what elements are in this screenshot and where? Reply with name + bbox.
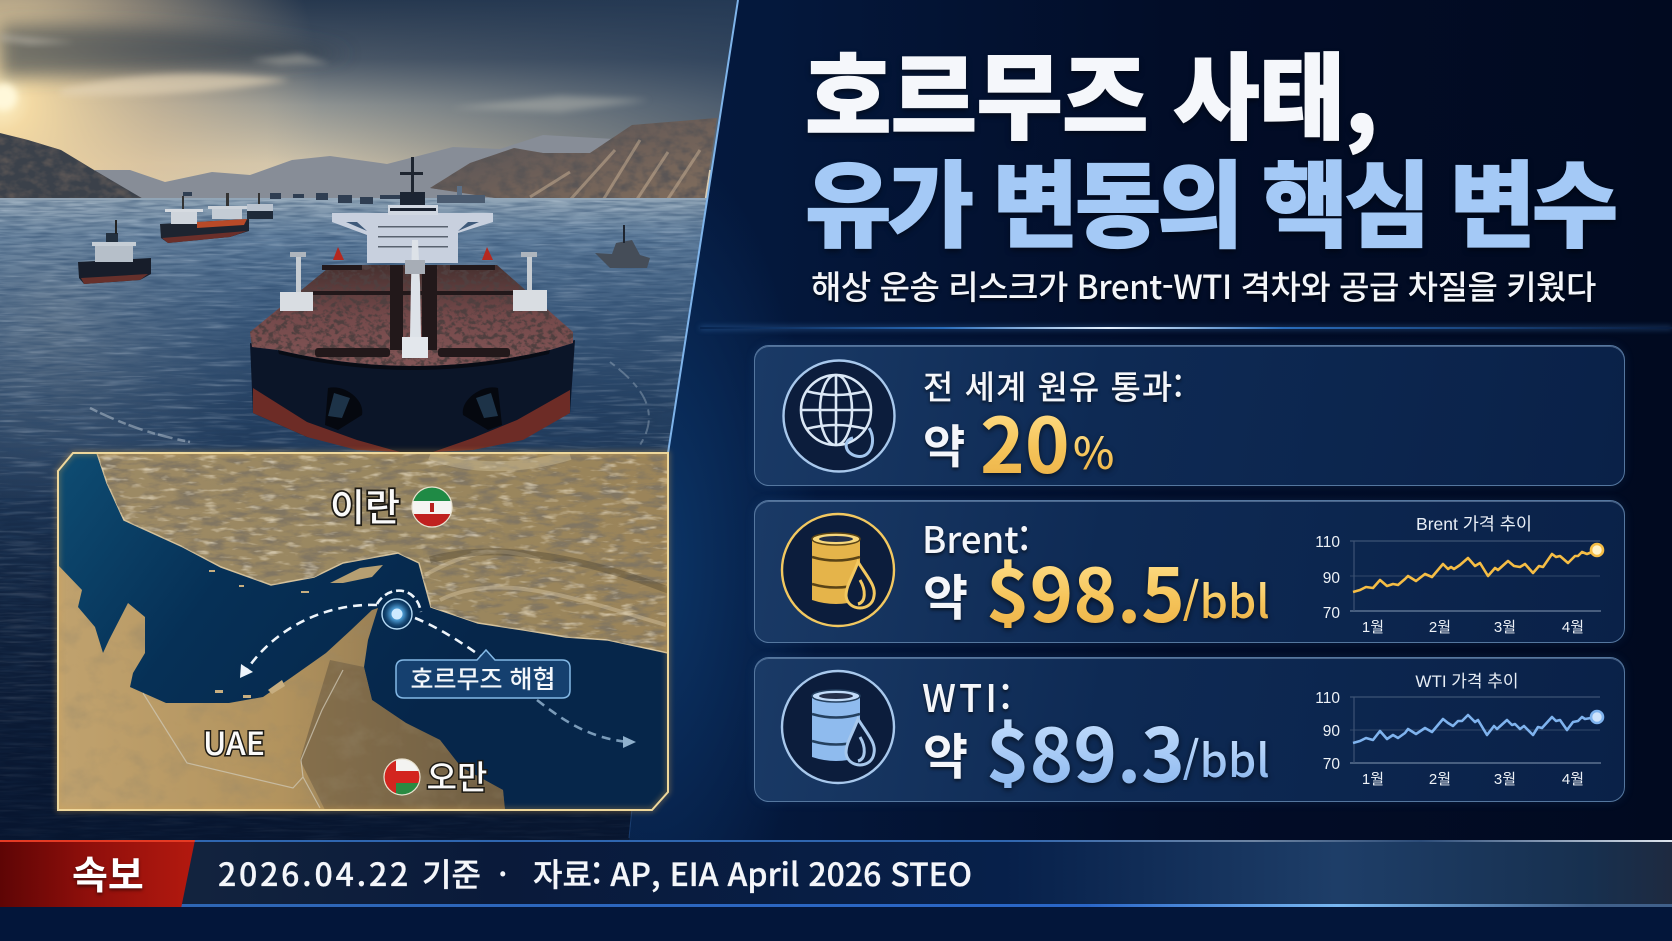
ticker top rule (0, 840, 1672, 842)
deck (250, 265, 573, 366)
anchors (325, 387, 362, 430)
lower photo fade (0, 501, 632, 840)
superstructure (332, 213, 493, 263)
chart: WTI price trend (1315, 672, 1604, 788)
sea (0, 198, 760, 848)
y axis labels: 110 (1315, 690, 1340, 707)
chart title: WTI 가격 추이 (1415, 672, 1519, 691)
background: lower band (0, 905, 1672, 941)
x axis labels (1362, 619, 1584, 636)
label: Iran (331, 486, 453, 528)
current WTI marker (1591, 711, 1603, 723)
current Brent marker (1591, 544, 1603, 556)
value: Brent price: $98.5 (986, 537, 1185, 644)
y axis labels: 90 (1323, 723, 1340, 740)
y axis labels: 70 (1323, 756, 1340, 773)
header divider (700, 327, 1672, 329)
x axis labels: 4월 (1562, 771, 1584, 788)
callout: strait name: 호르무즈 해협 (410, 660, 556, 696)
shipping route arrows (244, 591, 628, 742)
value: WTI price: $89.3 (986, 697, 1185, 804)
ticker text: source: 자료: AP, EIA April 2026 STEO (533, 850, 972, 896)
diagonal divider (629, 0, 738, 838)
value: WTI price: /bbl (1182, 725, 1270, 790)
ticker separator: · (498, 850, 508, 896)
chart title: Brent 가격 추이 (1416, 514, 1532, 534)
ship: main tanker (250, 157, 575, 452)
ship: far tanker (247, 193, 273, 219)
value: 20 percent: 약 (923, 411, 965, 477)
label: Brent: Brent: (922, 511, 1030, 564)
panel: world oil transit (754, 345, 1625, 486)
x axis labels: 3월 (1494, 619, 1516, 636)
value: Brent price (923, 537, 1270, 644)
value: 20 percent (923, 385, 1115, 495)
label: Iran: 이란 (330, 477, 400, 532)
axes and gridlines (1350, 541, 1601, 611)
title line 2: 유가 변동의 핵심 변수 (805, 131, 1614, 267)
title (805, 23, 1616, 267)
ticker text: date: 2026.04.22 (218, 850, 411, 896)
deck fittings (410, 240, 421, 337)
icon: Iran flag (410, 487, 454, 528)
map land: UAE and Oman (58, 565, 505, 810)
ship: grey warship (595, 225, 650, 268)
tag text: 속보 (72, 845, 144, 901)
icon: globe (782, 359, 896, 473)
value: 20 percent: % (1073, 418, 1114, 482)
panel: WTI (754, 657, 1625, 802)
y axis labels: 110 (1315, 534, 1340, 551)
label: UAE: UAE (203, 719, 265, 765)
ticker text: basis: 기준 (422, 850, 481, 896)
value: Brent price: /bbl (1182, 566, 1270, 631)
x axis labels (1362, 771, 1584, 788)
map panel (52, 448, 674, 816)
value: WTI price: 약 (923, 718, 968, 789)
value: Brent price: 약 (923, 559, 968, 630)
icon: oil barrel blue (780, 670, 896, 784)
icon: Oman flag (384, 759, 420, 795)
subtitle: 해상 운송 리스크가 Brent-WTI 격차와 공급 차질을 키웠다 (811, 261, 1596, 309)
breaking news tag (0, 840, 195, 907)
ship: mid tanker (160, 193, 249, 243)
map frame (58, 453, 668, 810)
y axis labels: 70 (1323, 605, 1340, 622)
distant ships (183, 186, 485, 204)
map sea (58, 453, 668, 810)
ticker bar (0, 840, 1672, 907)
callout: strait name (396, 650, 570, 698)
y axis labels: 90 (1323, 570, 1340, 587)
hull (250, 340, 575, 452)
value: 20 percent: 20 (980, 385, 1070, 495)
ship: left small tanker (78, 220, 151, 284)
icon: oil barrel gold (780, 512, 896, 628)
value: WTI price (923, 697, 1270, 804)
y axis labels (1315, 534, 1340, 622)
ticker bottom rule (0, 904, 1672, 907)
map land: Iran coast (97, 453, 668, 653)
panel: Brent (754, 500, 1625, 643)
x axis labels: 3월 (1494, 771, 1516, 788)
mountains (0, 118, 717, 198)
label: world oil transit: 전 세계 원유 통과: (923, 361, 1184, 409)
chart: Brent price trend (1315, 514, 1604, 636)
y axis labels (1315, 690, 1340, 773)
sky (0, 0, 737, 198)
x axis labels: 2월 (1429, 771, 1451, 788)
photo: tanker convoy in strait (0, 0, 739, 840)
label: Oman: 오만 (427, 751, 487, 799)
strait marker (382, 599, 412, 629)
x axis labels: 1월 (1362, 619, 1384, 636)
x axis labels: 1월 (1362, 771, 1384, 788)
axes and gridlines (1350, 697, 1601, 763)
label: Oman (383, 758, 488, 796)
WTI line (1353, 715, 1597, 743)
label: WTI: WTI: (922, 668, 1014, 723)
title line 1: 호르무즈 사태, (805, 23, 1377, 159)
x axis labels: 2월 (1429, 619, 1451, 636)
Brent line (1353, 550, 1597, 592)
x axis labels: 4월 (1562, 619, 1584, 636)
map borders (143, 670, 343, 808)
route arrowheads (240, 664, 636, 748)
